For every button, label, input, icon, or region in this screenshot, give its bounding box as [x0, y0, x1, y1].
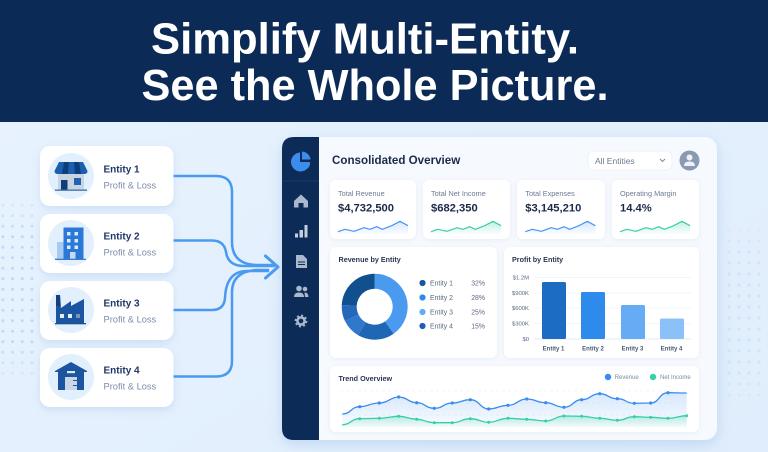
entity card 1 [40, 146, 174, 206]
KPI card: total revenue [330, 180, 416, 239]
bar chart: $1.2M [513, 276, 529, 282]
bar chart: Entity 4 [661, 346, 683, 352]
title: See the Whole Picture. [142, 62, 608, 110]
KPI card: operating margin [612, 180, 699, 239]
entity card 2: Profit & Loss [104, 248, 157, 258]
icon: storefront [54, 162, 88, 191]
KPI card: operating margin: 14.4% [620, 203, 652, 215]
KPI card: total expenses [517, 180, 605, 239]
icon: bar chart [295, 225, 308, 238]
entity card 3: Entity 3 [104, 299, 140, 310]
trend legend: Revenue [615, 375, 639, 381]
heading: Consolidated Overview [332, 154, 461, 167]
entity card 3: Profit & Loss [104, 315, 157, 325]
line chart [340, 391, 688, 427]
KPI card: total net income: $682,350 [431, 203, 478, 215]
KPI card: total expenses: Total Expenses [525, 189, 575, 198]
icon: document [296, 255, 307, 268]
icon: warehouse [55, 362, 87, 390]
bar chart: $600K [512, 306, 529, 312]
panel: profit by entity: Profit by Entity [512, 255, 563, 264]
entity card 4 [40, 348, 174, 407]
panel: revenue by entity [330, 247, 497, 358]
arrow head [266, 256, 278, 278]
bar chart [512, 276, 691, 352]
entity card 1: Profit & Loss [104, 180, 157, 190]
decorative dot field left [1, 204, 34, 374]
legend: 32% [471, 280, 485, 288]
legend: Entity 1 [430, 280, 453, 288]
legend: 25% [471, 310, 485, 316]
bar chart: Entity 2 [582, 346, 604, 352]
entity card 2: Entity 2 [104, 231, 140, 242]
dashboard window [282, 137, 717, 440]
icon: home [294, 194, 308, 208]
KPI card: total net income: Total Net Income [431, 189, 486, 198]
bar chart: Entity 3 [622, 346, 644, 352]
icon: users [294, 286, 308, 297]
bar chart: $0 [522, 337, 530, 343]
KPI card: total revenue: Total Revenue [338, 189, 385, 198]
KPI card: operating margin: Operating Margin [620, 189, 676, 198]
entity card 3 [40, 281, 174, 340]
icon: office building [55, 228, 86, 260]
legend: 15% [471, 324, 485, 330]
panel: trend overview: Trend Overview [338, 374, 392, 383]
KPI card: total net income [423, 180, 510, 239]
icon: gear [296, 316, 306, 326]
entity card 1: Entity 1 [104, 164, 140, 176]
entity card 4: Profit & Loss [104, 381, 157, 391]
panel: trend overview [330, 366, 699, 432]
title: Simplify Multi-Entity. [151, 16, 579, 64]
bar chart: Entity 1 [543, 346, 565, 352]
connector arrows [174, 176, 278, 376]
donut chart [342, 274, 408, 340]
sidebar [282, 137, 319, 440]
entity card 4: Entity 4 [104, 365, 140, 376]
legend: 28% [471, 295, 485, 302]
header band [0, 0, 768, 122]
title [142, 16, 608, 110]
decorative dot field right [728, 240, 760, 396]
panel: profit by entity [504, 247, 699, 358]
icon: pie logo [291, 152, 310, 171]
KPI card: total expenses: $3,145,210 [525, 203, 581, 215]
legend: Entity 2 [430, 295, 453, 302]
legend [419, 280, 485, 330]
trend legend: Net Income [660, 375, 691, 381]
legend: Entity 3 [430, 310, 453, 316]
bar chart: $900K [512, 291, 529, 297]
dropdown: All Entities [595, 156, 635, 166]
bar chart: $300K [512, 322, 529, 328]
panel: revenue by entity: Revenue by Entity [338, 255, 401, 264]
legend: Entity 4 [430, 324, 453, 330]
dropdown [588, 151, 672, 170]
entity card 2 [40, 214, 174, 273]
KPI card: total revenue: $4,732,500 [338, 203, 394, 215]
icon: factory [55, 295, 86, 324]
avatar [680, 150, 700, 170]
trend legend [605, 374, 691, 381]
